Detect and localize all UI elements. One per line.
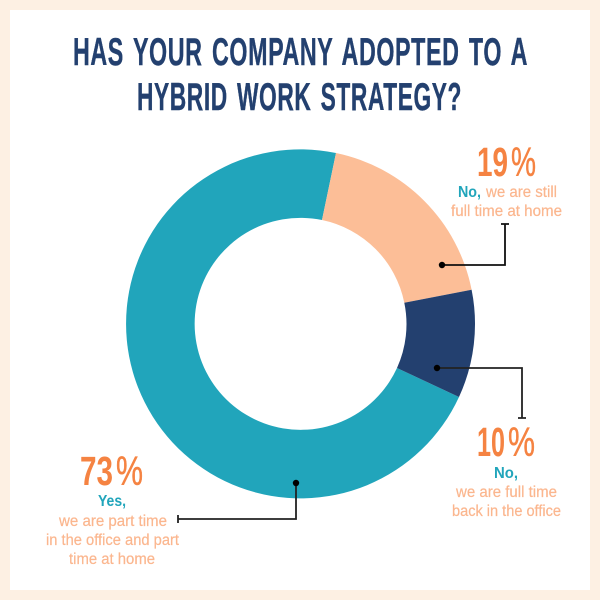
title xyxy=(73,31,528,119)
donut chart xyxy=(126,149,475,498)
callout: 10%: back in the office xyxy=(452,503,561,520)
callout: 19%: full time at home xyxy=(451,203,562,220)
callout: 19%: 19 xyxy=(477,139,508,185)
callout: 73%: we are part time xyxy=(58,513,167,530)
callout: 10%: % xyxy=(508,419,535,465)
callout: 73%: in the office and part xyxy=(46,532,180,549)
callout: 10% xyxy=(452,419,561,520)
segment: 10% no, in office xyxy=(397,290,475,397)
callout: 10%: we are full time xyxy=(455,484,557,501)
callout: 73%: time at home xyxy=(69,551,155,568)
callout: 73% xyxy=(46,448,180,568)
callout: 19%: No, xyxy=(458,184,481,201)
callout: 73%: 73 xyxy=(80,448,113,494)
callout: 73%: % xyxy=(116,448,143,494)
callout: 19% xyxy=(451,139,562,220)
segment: 73% yes xyxy=(126,149,459,498)
callout: 10%: 10 xyxy=(477,419,505,465)
leader line: 19% xyxy=(439,224,509,268)
leader line: 73% xyxy=(178,480,299,523)
callout: 19%: we are still xyxy=(485,184,557,201)
segment: 19% no, at home xyxy=(322,153,472,303)
leader line: 10% xyxy=(434,365,526,418)
callout: 73%: Yes, xyxy=(98,493,126,510)
callout: 10%: No, xyxy=(494,465,518,482)
callout: 19%: % xyxy=(511,139,536,185)
